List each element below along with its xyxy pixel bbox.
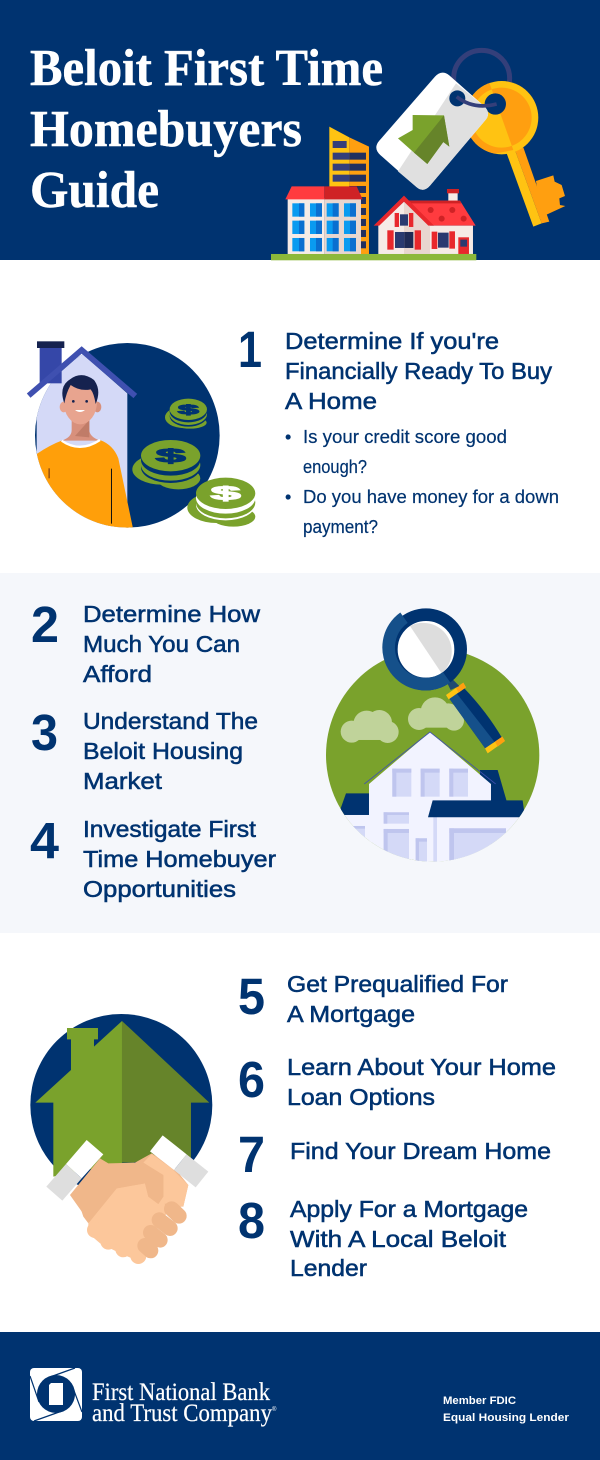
icon: clouds (341, 697, 464, 743)
icon: small coins (165, 399, 207, 429)
logo wordmark: and Trust Company (92, 1400, 272, 1427)
number 2: 2 (31, 596, 59, 653)
panel: footer (0, 1332, 600, 1460)
heading: step 8: Lender (290, 1255, 367, 1281)
logo wordmark: First National Bank (92, 1379, 270, 1406)
title: Guide (30, 162, 159, 219)
text block: footer disclosures (443, 1395, 570, 1424)
heading: step 3: Understand The (83, 708, 258, 734)
illustration: keys and houses (271, 50, 565, 260)
icon: person (37, 375, 133, 530)
illustration: handshake and house (30, 1014, 212, 1264)
icon: chimney (37, 341, 64, 383)
number 6: 6 (238, 1051, 265, 1108)
heading: step 5: Get Prequalified For (287, 971, 508, 997)
heading: step 6: Loan Options (287, 1084, 435, 1110)
title (30, 40, 383, 219)
heading: step 1: Financially Ready To Buy (285, 358, 552, 384)
heading: step 2: Afford (83, 661, 152, 687)
number 8: 8 (238, 1192, 265, 1249)
icon: medium coins: $ (156, 445, 187, 466)
text block: footer disclosures: Member FDIC (443, 1395, 516, 1407)
logo wordmark: ® (272, 1406, 277, 1413)
heading: step 2: Determine How (83, 601, 261, 627)
house wall (37, 353, 127, 530)
heading: step 3: Beloit Housing (83, 738, 243, 764)
icon: large coins (187, 478, 255, 527)
heading: step 7: Find Your Dream Home (290, 1138, 551, 1164)
heading: step 8: With A Local Beloit (290, 1226, 507, 1252)
heading: step 6: Learn About Your Home (287, 1054, 556, 1080)
heading: step 1 (285, 328, 552, 414)
icon: handshake (70, 1153, 188, 1264)
text block: step 1 bullets: Do you have money for a down (303, 487, 559, 507)
text block: step 1 bullets: enough? (303, 457, 367, 477)
number 5: 5 (238, 968, 265, 1025)
heading: step 8: Apply For a Mortgage (290, 1196, 528, 1222)
icon: left cuff (46, 1140, 103, 1201)
heading: step 2 (83, 601, 261, 687)
icon: house (330, 732, 525, 867)
heading: step 8 (290, 1196, 528, 1281)
text block: step 1 bullets: Is your credit score good (303, 427, 507, 447)
heading: step 1: A Home (285, 388, 377, 414)
logo mark (30, 1368, 82, 1421)
number 7: 7 (238, 1126, 265, 1183)
icon: tower (329, 127, 369, 254)
heading: step 2: Much You Can (83, 631, 240, 657)
panel: steps 2 to 4 (0, 573, 600, 933)
icon: tag (376, 73, 497, 190)
text block: step 1 bullets: payment? (303, 517, 378, 537)
icon: magnifier (389, 615, 505, 753)
text block: step 1 bullets: • (285, 427, 291, 447)
text block: footer disclosures: Equal Housing Lender (443, 1412, 570, 1424)
illustration: house and magnifier (326, 615, 539, 867)
icon: ground (271, 254, 476, 260)
icon: medium coins (132, 440, 200, 489)
panel: step 1 (29, 321, 559, 537)
heading: step 5: A Mortgage (287, 1001, 415, 1027)
icon: house (374, 189, 476, 254)
heading: step 3 (83, 708, 258, 794)
icon: key (470, 81, 566, 227)
panel: header (0, 0, 600, 260)
icon: right cuff (150, 1135, 208, 1187)
icon: house (35, 1021, 209, 1177)
number 4: 4 (30, 812, 60, 869)
panel: steps 5 to 8 (30, 968, 556, 1281)
icon: apartment building (285, 186, 363, 254)
title: Beloit First Time (30, 40, 383, 97)
heading: step 6 (287, 1054, 556, 1110)
heading: step 4 (83, 816, 276, 902)
text block: step 1 bullets (285, 427, 559, 537)
heading: step 4: Investigate First (83, 816, 256, 842)
icon: roof (29, 350, 135, 396)
icon: large coins: $ (211, 483, 242, 504)
heading: step 5 (287, 971, 508, 1027)
title: Homebuyers (30, 101, 302, 158)
heading: step 3: Market (83, 768, 163, 794)
number 3: 3 (31, 704, 58, 761)
heading: step 1: Determine If you're (285, 328, 499, 354)
text block: step 1 bullets: • (285, 487, 291, 507)
logo wordmark (92, 1379, 277, 1427)
icon: key ring (454, 50, 510, 106)
heading: step 4: Time Homebuyer (83, 846, 276, 872)
heading: step 4: Opportunities (83, 876, 236, 902)
number 1: 1 (238, 321, 262, 378)
icon: small coins: $ (178, 402, 200, 417)
illustration: person and coins (29, 341, 255, 530)
